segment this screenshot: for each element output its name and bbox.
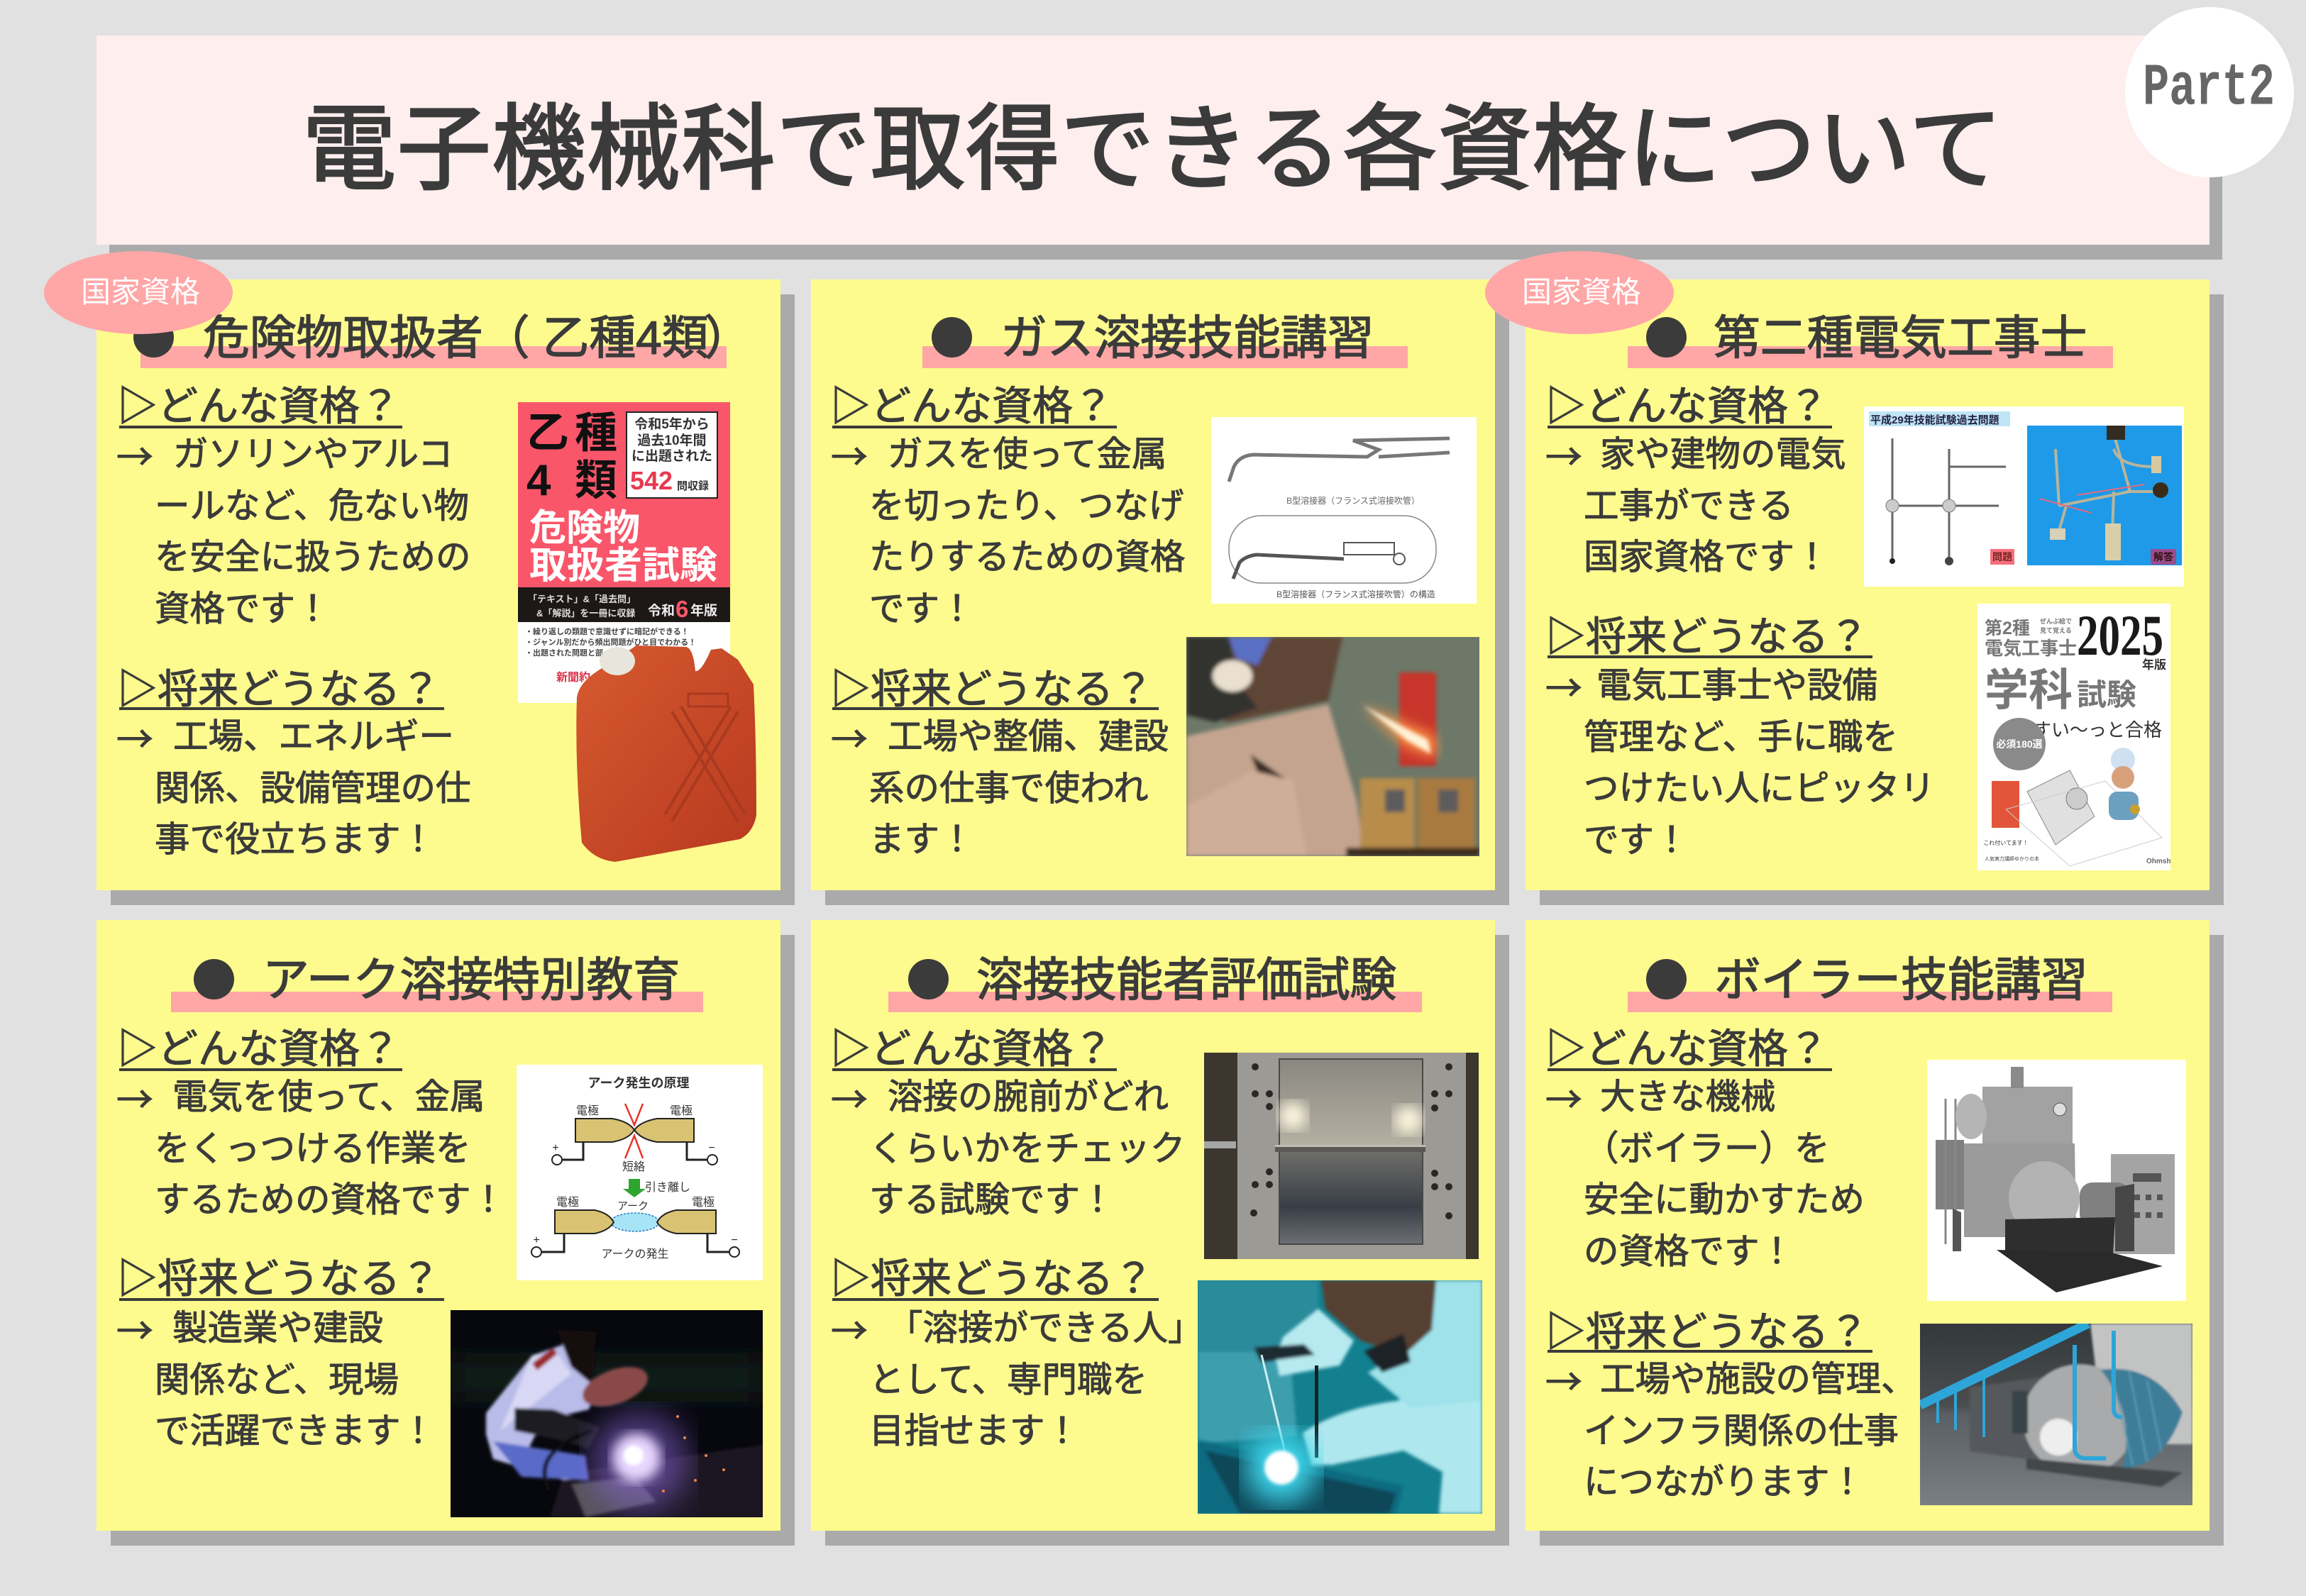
future text xyxy=(831,1303,1203,1457)
bullet xyxy=(932,317,972,358)
future text: 関係など、現場 xyxy=(155,1361,399,1399)
image: boiler machine xyxy=(1927,1060,2186,1301)
image: arc principle diagram: アーク発生の原理 xyxy=(588,1076,689,1090)
future text: ます！ xyxy=(869,820,975,859)
description text: → xyxy=(116,1070,153,1124)
image: arc principle diagram: アーク xyxy=(617,1200,649,1212)
image: gas welding photo xyxy=(1186,637,1479,856)
description text xyxy=(116,428,471,628)
image: exam book cover: ・ジャンル別だから頻出問題がひと目でわかる！ xyxy=(525,637,696,647)
image: exam book cover: 令和5年から xyxy=(634,416,710,432)
image: exam book cover: 4 xyxy=(526,456,551,505)
image: exam book cover: 6 xyxy=(675,596,688,622)
image: electrician exam book: これ付いてます！ xyxy=(1983,839,2029,846)
image: arc principle diagram: + xyxy=(533,1234,540,1246)
bullet xyxy=(133,317,174,358)
heading underline bar xyxy=(888,992,1422,1012)
subheading: future: ▷将来どうなる？ xyxy=(1545,1309,1869,1355)
image: arc principle diagram: 電極 xyxy=(556,1196,579,1209)
description text: の資格です！ xyxy=(1584,1231,1794,1271)
image: electrician exam book: 年版 xyxy=(2142,658,2166,672)
future text: です！ xyxy=(1584,820,1689,860)
subheading: what: ▷どんな資格？ xyxy=(830,384,1113,429)
future text: → xyxy=(116,1302,153,1355)
heading underline bar xyxy=(1628,992,2112,1012)
future text: で活躍できます！ xyxy=(155,1412,436,1451)
image: exam book cover xyxy=(518,402,730,703)
image: exam book cover: 類 xyxy=(575,457,617,504)
bullet xyxy=(194,959,234,999)
future text: → xyxy=(1545,659,1582,712)
description text: → xyxy=(831,428,868,481)
panel: 溶接技能者評価試験 xyxy=(811,920,1495,1531)
image: welded test plate xyxy=(1204,1053,1479,1259)
future text xyxy=(831,710,1169,859)
image: arc principle diagram: − xyxy=(708,1142,715,1154)
description text xyxy=(1545,428,1846,577)
image: exam book cover: に出題された xyxy=(631,448,712,464)
image: TIG welding photo xyxy=(1198,1280,1482,1514)
description text xyxy=(116,1072,506,1226)
image: electrician exam book: 第2種 xyxy=(1985,619,2030,638)
image: arc principle diagram: 引き離し xyxy=(645,1181,690,1194)
image: electrician exam book: すい〜っと合格 xyxy=(2033,719,2162,741)
future text: 製造業や建設 xyxy=(172,1309,383,1348)
future text: 工場や整備、建設 xyxy=(888,717,1169,756)
future text: 工場、エネルギー xyxy=(173,717,454,756)
image: exam book cover: 取扱者試験 xyxy=(529,545,717,587)
image: exam book cover: &「解説」を一冊に収録 xyxy=(536,608,635,619)
panel: アーク溶接特別教育 xyxy=(96,920,780,1531)
description text: → xyxy=(116,428,153,481)
bullet xyxy=(1646,959,1687,999)
subheading: what: ▷どんな資格？ xyxy=(1545,384,1828,429)
description text: 資格です！ xyxy=(155,589,331,628)
description text: を安全に扱うための xyxy=(155,538,471,577)
future text: → xyxy=(116,710,153,763)
image: electrician exam book: 電気工事士 xyxy=(1985,638,2077,659)
description text: 工事ができる xyxy=(1584,487,1794,525)
image: exam book cover: 種 xyxy=(575,409,617,457)
image: practical exam sample: 平成29年技能試験過去問題 xyxy=(1870,414,1999,426)
bullet xyxy=(1646,317,1687,358)
badge: national qualification 1: 国家資格 xyxy=(81,275,200,309)
description text: くらいかをチェック xyxy=(869,1129,1185,1168)
qualification heading: ボイラー技能講習 xyxy=(1714,953,2087,1006)
panel: 第二種電気工事士 xyxy=(1526,279,2210,890)
subheading: what: ▷どんな資格？ xyxy=(117,384,400,429)
image: electrician exam book: 学科 xyxy=(1985,666,2073,715)
qualification heading: 危険物取扱者（ 乙種4類） xyxy=(203,311,751,364)
panel: ガス溶接技能講習 xyxy=(811,279,1495,890)
image: exam book cover: 過去10年間 xyxy=(637,432,707,448)
heading underline bar xyxy=(1628,346,2113,368)
badge: national qualification 2 xyxy=(1485,251,1674,334)
image: arc principle diagram: アークの発生 xyxy=(601,1248,669,1260)
subheading: future: ▷将来どうなる？ xyxy=(117,1256,441,1302)
description text: 電気を使って、金属 xyxy=(172,1077,485,1116)
image: exam book cover: 危険物 xyxy=(529,508,640,549)
description text: ガスを使って金属 xyxy=(888,435,1167,474)
future text: 工場や施設の管理、 xyxy=(1600,1360,1916,1399)
image: arc principle diagram xyxy=(517,1065,763,1280)
future text xyxy=(116,710,471,859)
future text: 電気工事士や設備 xyxy=(1596,666,1877,705)
description text: → xyxy=(1545,1070,1582,1124)
heading underline bar xyxy=(171,992,703,1012)
description text xyxy=(1545,1072,1865,1278)
image: gas torch diagram xyxy=(1211,417,1477,604)
description text: → xyxy=(1545,428,1582,481)
description text: するための資格です！ xyxy=(155,1180,506,1219)
description text xyxy=(831,428,1185,628)
heading underline bar xyxy=(140,346,727,368)
description text: 家や建物の電気 xyxy=(1600,435,1846,474)
future text: 「溶接ができる人」 xyxy=(888,1309,1203,1348)
future text: インフラ関係の仕事 xyxy=(1584,1412,1899,1450)
image: electrician exam book: 必須180選 xyxy=(1996,738,2043,750)
description text: をくっつける作業を xyxy=(155,1129,471,1168)
image: arc principle diagram: 短絡 xyxy=(622,1160,645,1173)
image: arc principle diagram: + xyxy=(552,1142,559,1154)
image: arc principle diagram: 電極 xyxy=(692,1196,715,1209)
description text: → xyxy=(831,1070,868,1124)
image: exam book cover: 542 xyxy=(630,466,673,495)
badge: Part2: Part2 xyxy=(2143,54,2275,122)
badge: national qualification 2: 国家資格 xyxy=(1522,275,1641,309)
image: electrician exam book: 見て覚える xyxy=(2040,626,2072,634)
description text: ガソリンやアルコ xyxy=(173,435,453,474)
image: practical exam sample xyxy=(1864,406,2184,587)
image: electrician exam book xyxy=(1977,604,2170,870)
heading underline bar xyxy=(922,346,1408,368)
future text xyxy=(1545,659,1935,860)
description text: 大きな機械 xyxy=(1600,1077,1775,1116)
image: exam book cover: ・繰り返しの類題で意識せずに暗記ができる！ xyxy=(525,626,689,636)
description text: する試験です！ xyxy=(869,1180,1115,1219)
future text: 目指せます！ xyxy=(869,1412,1080,1451)
image: practical exam sample: 解答 xyxy=(2153,551,2173,563)
future text: につながります！ xyxy=(1584,1463,1865,1502)
panel: ボイラー技能講習 xyxy=(1526,920,2210,1531)
image: exam book cover: 乙 xyxy=(526,409,569,457)
future text: 関係、設備管理の仕 xyxy=(155,769,471,807)
future text: 事で役立ちます！ xyxy=(155,820,436,859)
description text: を切ったり、つなげ xyxy=(869,487,1184,525)
description text: ールなど、危ない物 xyxy=(155,487,469,525)
image: arc principle diagram: 電極 xyxy=(576,1104,599,1117)
subheading: future: ▷将来どうなる？ xyxy=(830,1256,1154,1302)
description text: 国家資格です！ xyxy=(1584,538,1829,577)
image: exam book cover: 令和 xyxy=(648,603,675,619)
bullet xyxy=(908,959,949,999)
image: exam book cover: ・出題された問題と部 xyxy=(525,648,603,658)
qualification heading: 第二種電気工事士 xyxy=(1714,311,2087,364)
qualification heading: ガス溶接技能講習 xyxy=(1000,311,1374,364)
image: gas torch diagram: B型溶接器（フランス式溶接吹管） xyxy=(1286,495,1420,506)
image: arc principle diagram: 電極 xyxy=(670,1104,693,1117)
subheading: what: ▷どんな資格？ xyxy=(117,1026,400,1072)
image: exam book cover: 「テキスト」&「過去問」 xyxy=(528,594,636,604)
description text: （ボイラー）を xyxy=(1584,1129,1829,1168)
future text: → xyxy=(831,1302,868,1355)
subheading: future: ▷将来どうなる？ xyxy=(1545,614,1869,660)
image: gas torch diagram: B型溶接器（フランス式溶接吹管）の構造 xyxy=(1276,589,1435,599)
badge: Part2 xyxy=(2125,7,2294,177)
main heading: 電子機械科で取得できる各資格について xyxy=(302,97,2004,202)
image: electrician exam book: 人気実力講師ゆかりの本 xyxy=(1985,855,2039,862)
future text: つけたい人にピッタリ xyxy=(1584,769,1935,808)
future text xyxy=(116,1303,436,1457)
description text: 溶接の腕前がどれ xyxy=(888,1077,1169,1116)
future text: → xyxy=(1545,1353,1582,1406)
description text: 安全に動かすため xyxy=(1584,1180,1865,1219)
image: practical exam sample: 問題 xyxy=(1992,551,2012,563)
image: exam book cover: 問収録 xyxy=(677,480,709,492)
image: red fuel canister xyxy=(576,645,756,862)
description text: です！ xyxy=(869,589,975,628)
subheading: future: ▷将来どうなる？ xyxy=(830,667,1154,712)
panel: 危険物取扱者 xyxy=(96,279,780,890)
image: arc principle diagram: − xyxy=(731,1234,738,1246)
future text: 系の仕事で使われ xyxy=(869,769,1149,807)
future text: として、専門職を xyxy=(869,1361,1147,1399)
subheading: what: ▷どんな資格？ xyxy=(1545,1026,1828,1072)
image: exam book cover: 新聞約 xyxy=(556,671,590,684)
subheading: what: ▷どんな資格？ xyxy=(830,1026,1113,1072)
description text xyxy=(831,1072,1185,1226)
image: boiler room photo xyxy=(1920,1324,2192,1505)
future text xyxy=(1545,1354,1916,1508)
future text: → xyxy=(831,710,868,763)
image: exam book cover: 年版 xyxy=(690,602,717,619)
qualification heading: 溶接技能者評価試験 xyxy=(976,953,1396,1006)
badge: national qualification 1 xyxy=(44,251,233,334)
title banner xyxy=(96,35,2210,245)
description text: たりするための資格 xyxy=(869,538,1185,577)
future text: 管理など、手に職を xyxy=(1584,718,1898,756)
subheading: future: ▷将来どうなる？ xyxy=(117,667,441,712)
qualification heading: アーク溶接特別教育 xyxy=(263,953,680,1006)
image: arc welding photo xyxy=(451,1310,763,1517)
image: electrician exam book: ぜんぶ絵で xyxy=(2040,617,2072,625)
image: electrician exam book: 試験 xyxy=(2077,678,2136,711)
